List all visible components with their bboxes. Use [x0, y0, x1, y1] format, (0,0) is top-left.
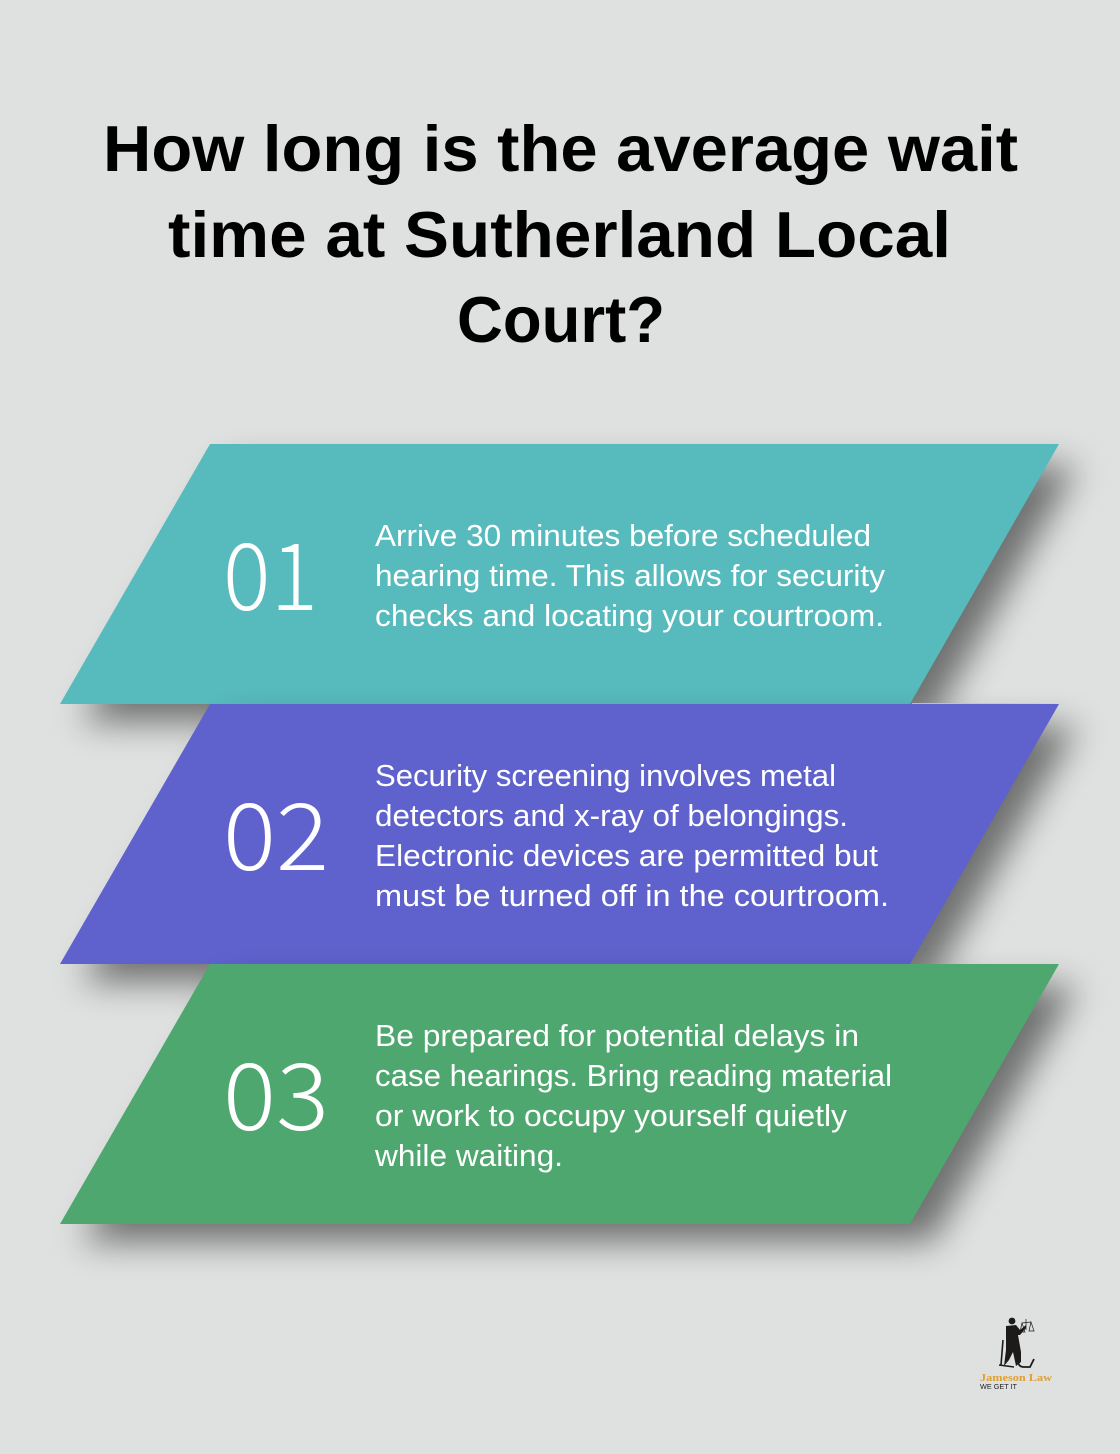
number 01: 01	[223, 502, 318, 637]
panel 2 text: must be turned off in the courtroom.	[375, 878, 889, 913]
panel 3 text: while waiting.	[374, 1138, 563, 1173]
panel 3 text: Be prepared for potential delays in	[375, 1018, 859, 1053]
logo wordmark: Jameson Law	[980, 1372, 1052, 1384]
panel 3: potential delays	[60, 964, 1077, 1242]
panel 3 text: or work to occupy yourself quietly	[375, 1098, 848, 1133]
panel 2 text	[375, 758, 889, 913]
panel 2 text: Electronic devices are permitted but	[375, 838, 878, 873]
panel 1 text	[375, 518, 885, 633]
panel 2 text: Security screening involves metal	[375, 758, 836, 793]
icon: lady justice with scales	[999, 1318, 1034, 1367]
panel 1 text: checks and locating your courtroom.	[375, 598, 884, 633]
panel 3 text: case hearings. Bring reading material	[375, 1058, 892, 1093]
number 03: 03	[223, 1022, 329, 1157]
panel 2: security screening	[60, 703, 1077, 982]
logo: Jameson Law	[980, 1318, 1052, 1391]
panel 1 text: Arrive 30 minutes before scheduled	[375, 518, 871, 553]
panel 1 text: hearing time. This allows for security	[375, 558, 885, 593]
title	[103, 112, 1018, 356]
title: Court?	[457, 283, 665, 356]
title: time at Sutherland Local	[168, 198, 951, 271]
panel 1: arrive early	[60, 444, 1077, 722]
panel 3 text	[374, 1018, 892, 1173]
title: How long is the average wait	[103, 112, 1018, 185]
panel 2 text: detectors and x-ray of belongings.	[375, 798, 848, 833]
number 02: 02	[223, 762, 329, 897]
logo tagline: WE GET IT	[980, 1384, 1018, 1391]
